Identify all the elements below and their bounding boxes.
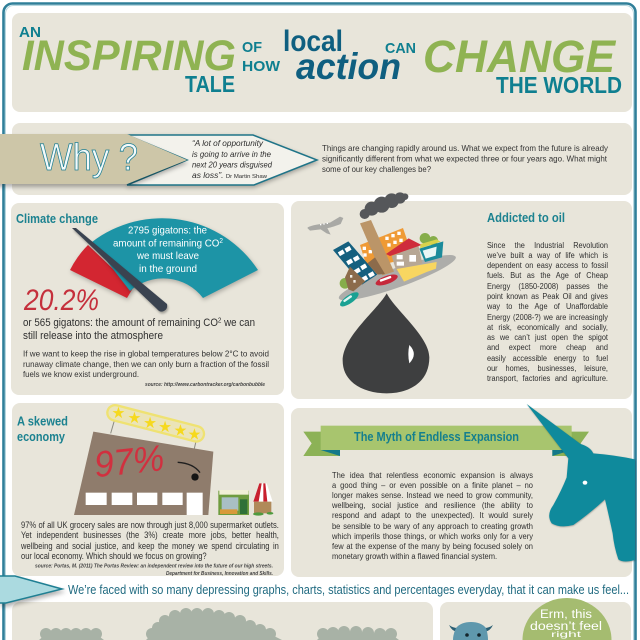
- icon: teal car: [338, 290, 361, 309]
- icon: cloud right: [317, 626, 399, 640]
- body text: myth: longer makes sense. Instead we need to grow community,: [332, 491, 533, 500]
- stat: 20.2%: 20.2%: [23, 284, 99, 317]
- icon: blue tower: [333, 241, 377, 285]
- body text: skewed economy: wellbeing and social justice, and keep the money we spend circulating in: [21, 541, 279, 551]
- heading: climate change: Climate change: [16, 211, 98, 226]
- heading: title text: OF: [242, 39, 262, 56]
- panel: climate change: [11, 203, 284, 395]
- icon: plane: [307, 217, 343, 235]
- body text: oil: our homes, businesses, leisure,: [487, 364, 608, 373]
- icon: bushes: [340, 233, 438, 289]
- gauge label: 2795 gigatons: the: [128, 224, 207, 236]
- arrow: quote pointer: [127, 135, 317, 185]
- icon: windows: [86, 493, 203, 515]
- body text: myth: a good thing – or even possible on a finite planet – no: [332, 481, 533, 490]
- panel: skewed economy: [12, 403, 284, 576]
- panel: myth of endless expansion: [291, 408, 632, 577]
- intro text: [322, 143, 609, 174]
- quote: “A lot of opportunity: [192, 139, 264, 148]
- gauge label: in the ground: [139, 263, 197, 275]
- body text: myth: be sensible to be wary of any approach to creating growth: [332, 522, 533, 531]
- source: Department for Business, Innovation and Skills.: [166, 571, 273, 577]
- source: source: Portas, M. (2011) The Portas Review: an independent review into the future of our high streets.: [35, 564, 273, 570]
- heading: title text: AN: [19, 25, 41, 41]
- icon: house: [386, 238, 422, 272]
- chart: gauge: [70, 218, 258, 312]
- body text: oil: transport, factories and agriculture.: [487, 374, 608, 383]
- quote: [192, 139, 273, 180]
- body text: oil: way to the Age of Unaffordable: [487, 302, 608, 311]
- icon: town on oil drop: [307, 192, 459, 393]
- heading: title text: local: [283, 25, 343, 58]
- body text: skewed economy: our local economy. Which should we focus on growing?: [21, 551, 207, 561]
- body text: If we want to keep the rise in global temperatures below 2°C to avoid: [23, 348, 269, 358]
- arrow: lead-in pointer: [0, 575, 66, 609]
- quote: as loss”. Dr Martin Shaw: [192, 171, 267, 180]
- body text: oil: point known as Peak Oil and gives: [487, 292, 608, 301]
- source: [35, 564, 273, 577]
- gauge label: 2: [219, 238, 223, 245]
- icon: star sign: ★: [187, 427, 201, 444]
- icon: red car: [374, 272, 399, 288]
- heading: addicted to oil: Addicted to oil: [487, 210, 565, 225]
- stat: 97%: 97%: [92, 437, 166, 485]
- panel: title: [12, 13, 632, 112]
- body text: oil: Since the Industrial Revolution: [487, 240, 608, 250]
- quote: next 20 years disguised: [192, 160, 273, 170]
- body text: skewed economy: Yet independent businesses (the 3%) create more jobs, better health,: [21, 530, 279, 540]
- heading: a skewed economy: [17, 414, 68, 444]
- gauge label: amount of remaining CO: [113, 238, 227, 250]
- body text: myth: respond and adapt to the unexpected). It would surely: [332, 511, 533, 520]
- heading: title text: INSPIRING: [22, 32, 236, 80]
- source: source: http://www.carbontracker.org/carbonbubble: [145, 382, 265, 388]
- icon: small shop: [218, 490, 249, 515]
- body text: myth: The idea that relentless economic expansion is always: [332, 471, 533, 480]
- icon: smoke: [360, 192, 408, 219]
- heading: title text: TALE: [185, 71, 235, 97]
- body text: oil: [487, 240, 608, 383]
- heading: title text: action: [296, 46, 401, 87]
- stat caption: or 565 gigatons: the amount of remaining CO: [23, 317, 239, 329]
- speech bubble: doesn’t feel: [530, 621, 602, 633]
- banner ribbon: [303, 426, 589, 456]
- body text: myth: wellbeing, social justice and resilience (the ability to: [332, 501, 533, 510]
- body text: myth: which imperils those things, or which works only for a very: [332, 532, 533, 541]
- body text: oil: at risk, economically and socially,: [487, 323, 608, 332]
- body text: oil: as we can’t just open the spigot: [487, 333, 608, 342]
- arrow: why banner: [0, 134, 187, 184]
- body text: oil: easily accessible energy to fuel: [487, 354, 608, 363]
- body text: [23, 348, 269, 379]
- stat caption: [23, 317, 255, 342]
- quote: is going to arrive in the: [192, 150, 272, 159]
- stat caption: still release into the atmosphere: [23, 330, 163, 342]
- body text: oil: Energy (1850-2008) passes the: [487, 282, 608, 291]
- icon: store building: [74, 432, 213, 515]
- body text: oil: fuels. But as the Age of Cheap: [487, 271, 608, 280]
- gauge label: we must leave: [136, 250, 199, 262]
- body text: oil: Energy (2008-?) we are increasingly: [487, 313, 608, 322]
- icon: cloud centre: [146, 608, 282, 640]
- stat caption: 2: [218, 318, 222, 324]
- speech bubble: Erm, this: [540, 609, 592, 621]
- body text: fuels we know exist underground.: [23, 369, 139, 379]
- speech bubble: right: [551, 630, 582, 639]
- icon: star sign: ★: [143, 415, 157, 432]
- icon: sign posts: [111, 418, 197, 450]
- gauge label: [113, 224, 223, 275]
- speech bubble: [522, 598, 612, 640]
- intro text: Things are changing rapidly around us. What we expect from the future is already: [322, 143, 609, 153]
- body text: oil: we’ve built a way of life which is: [487, 251, 608, 260]
- icon: yellow building: [397, 262, 437, 282]
- heading: a skewed economy: economy: [17, 429, 66, 444]
- heading: title text: CAN: [385, 40, 416, 57]
- heading: title text: HOW: [242, 58, 281, 75]
- panel: clouds: [12, 602, 433, 640]
- intro text: some of our key challenges be?: [322, 164, 431, 174]
- icon: platter: [336, 248, 459, 307]
- icon: star sign: [106, 403, 206, 444]
- heading: why: Why ?: [40, 137, 138, 179]
- icon: star sign: ★: [111, 405, 125, 422]
- panel: creature: [440, 602, 631, 640]
- heading: a skewed economy: A skewed: [17, 414, 68, 428]
- icon: shop: [419, 239, 443, 262]
- body text: myth: [332, 471, 533, 561]
- heading: title text: CHANGE: [423, 31, 617, 82]
- icon: brown houses: [345, 257, 385, 291]
- icon: unicorn: [527, 404, 635, 562]
- heading: title text: [19, 25, 622, 98]
- icon: chimney: [360, 220, 394, 275]
- icon: star sign: ★: [158, 419, 172, 436]
- body text: oil: and expect more cheap and: [487, 343, 608, 352]
- body text: skewed economy: 97% of all UK grocery sales are now through just 8,000 supermarket outlets.: [21, 520, 279, 530]
- icon: cloud left: [39, 628, 104, 640]
- panel: why: [12, 123, 632, 195]
- stat caption: we can: [221, 317, 255, 329]
- heading: title text: THE WORLD: [496, 72, 622, 98]
- icon: oil drop: [343, 293, 429, 393]
- icon: market stall: [253, 483, 273, 516]
- icon: supermarket: [74, 403, 273, 516]
- body text: myth: monetary growth within a flawed financial system.: [332, 552, 497, 561]
- body text: skewed economy: [21, 520, 279, 561]
- body text: runaway climate change, then we can only burn a fraction of the fossil: [23, 359, 269, 369]
- panel: addicted to oil: [291, 201, 632, 399]
- icon: star sign: ★: [173, 422, 187, 439]
- body text: oil: dependent on easy access to fossil: [487, 261, 608, 270]
- body text: myth: few at the expense of the many by being focused solely on: [332, 542, 533, 551]
- icon: orange block: [360, 228, 413, 268]
- heading: myth: The Myth of Endless Expansion: [354, 429, 519, 444]
- icon: creature: [449, 622, 493, 640]
- icon: star sign: ★: [127, 410, 141, 427]
- icon: smile and dot: [178, 462, 200, 481]
- intro text: significantly different from what we expected three or four years ago. What might: [322, 154, 608, 164]
